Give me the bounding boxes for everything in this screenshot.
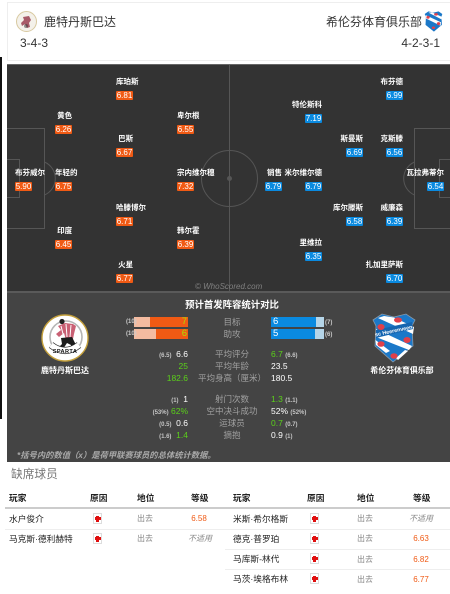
stat row: average rating: (6.5) 6.6 [159, 349, 188, 359]
away row: 马茨·埃格布林: 6.77 [413, 575, 429, 584]
player: 印度 [55, 226, 72, 249]
stat row: tackles: (1.6) 1.4 [159, 430, 188, 440]
away row: 马茨·埃格布林 [225, 572, 450, 586]
away goals baseline: (7) [325, 320, 332, 326]
stat row: shots [171, 394, 298, 404]
stat row: average age: 平均年龄 [215, 361, 249, 371]
player: 米尔维尔德: 米尔维尔德 [284, 168, 322, 177]
player: 扎加里萨斯: 6.70 [387, 274, 402, 283]
home row: 马克斯·德利赫特 [0, 532, 225, 546]
player: 布芬威尔 [15, 168, 45, 191]
home row: 马克斯·德利赫特: 不适用 [188, 534, 212, 543]
player: 韩尔霍 [177, 226, 200, 249]
home row: 马克斯·德利赫特: 出去 [137, 534, 153, 543]
player: 库尔滕斯 [333, 203, 363, 226]
watermark: © WhoScored.com [195, 282, 262, 291]
home players [15, 77, 214, 283]
stat row: tackles [159, 430, 293, 440]
player: 特伦斯科: 特伦斯科 [292, 100, 322, 109]
player: 年轻的 [55, 168, 78, 191]
player: 卑尔根: 卑尔根 [177, 111, 200, 120]
player: 哈滕博尔: 6.71 [117, 217, 132, 226]
stat row: average rating: 6.7 (6.6) [271, 349, 298, 359]
player: 宗内维尔穗: 宗内维尔穗 [177, 168, 214, 177]
player: 米尔维尔德 [284, 168, 322, 191]
player: 瓦拉弗蒂尔: 6.54 [428, 182, 443, 191]
player: 卑尔根 [177, 111, 200, 134]
player: 印度: 印度 [57, 226, 72, 235]
header panel [7, 2, 450, 61]
goals label: 目标 [223, 317, 240, 327]
player: 印度: 6.45 [56, 240, 71, 249]
player: 特伦斯科 [292, 100, 322, 123]
stat row: aerial duels: 空中决斗成功 [206, 406, 258, 416]
away row: 马茨·埃格布林: 马茨·埃格布林 [233, 574, 288, 584]
player: 巴斯: 巴斯 [118, 134, 133, 143]
stats title: 预计首发阵容统计对比 [185, 299, 279, 310]
table header rule [225, 507, 450, 509]
stat row: dribbles: 0.7 (0.7) [271, 418, 298, 428]
stat row: average height: 182.6 [167, 373, 188, 383]
player: 年轻的: 年轻的 [55, 168, 78, 177]
icon: home team crest small [16, 11, 37, 32]
stat row: average height: 180.5 [271, 373, 292, 383]
column: rating: 等级 [413, 493, 430, 503]
away row: 马库斯-林代: 马库斯-林代 [233, 554, 279, 564]
player: 火星 [116, 260, 133, 283]
stat row: tackles: 摘抱 [223, 430, 240, 440]
row rule [5, 529, 225, 530]
player: 库珀斯: 库珀斯 [116, 77, 138, 86]
away assists baseline: (6) [325, 332, 332, 338]
away formation: 4-2-3-1 [401, 36, 440, 50]
assists label: 助攻 [223, 329, 240, 339]
home row: 马克斯·德利赫特: 马克斯·德利赫特 [9, 534, 73, 544]
away row: 米斯·希尔格斯: 不适用 [409, 514, 433, 523]
player: 布芬德: 布芬德 [380, 77, 403, 86]
home row: 水户俊介: 出去 [137, 514, 153, 523]
player: 卑尔根: 6.55 [178, 125, 193, 134]
home formation: 3-4-3 [20, 36, 48, 50]
player: 宗内维尔穗: 7.32 [178, 182, 193, 191]
stat row: average age: 23.5 [271, 361, 288, 371]
home team label: 鹿特丹斯巴达 [41, 366, 89, 375]
assists comparison bars [126, 328, 332, 339]
player: 特伦斯科: 7.19 [306, 114, 321, 123]
away table header [225, 0, 450, 505]
panel: missing players away table rules [225, 507, 450, 570]
left edge strip [0, 57, 2, 419]
player: 哈滕博尔: 哈滕博尔 [116, 203, 146, 212]
player: 斯曼斯: 斯曼斯 [340, 134, 363, 143]
player: 销售: 销售 [267, 168, 282, 177]
icon: Heerenveen crest [372, 314, 416, 362]
stat row: dribbles: 运球员 [219, 418, 245, 428]
stat row: aerial duels: (53%) 62% [153, 406, 188, 416]
stat row: dribbles: (0.5) 0.6 [159, 418, 188, 428]
player: 米尔维尔德: 6.79 [306, 182, 321, 191]
player: 库尔滕斯: 库尔滕斯 [333, 203, 363, 212]
player: 销售: 6.79 [266, 182, 281, 191]
player: 斯曼斯: 6.69 [347, 148, 362, 157]
player: 韩尔霍: 6.39 [178, 240, 193, 249]
icon: Heerenveen crest: sc Heerenveen [375, 325, 413, 338]
stat row: average age: 25 [179, 361, 188, 371]
away goals bar: 6 [273, 316, 278, 327]
table header rule [5, 507, 225, 509]
stat row: shots: 射门次数 [215, 394, 249, 404]
home team name: 鹿特丹斯巴达 [44, 15, 116, 29]
player: 年轻的: 6.75 [56, 182, 71, 191]
home row: 水户俊介 [9, 513, 207, 524]
away goals bar [271, 317, 324, 327]
player: 巴斯 [116, 134, 133, 157]
figure [56, 323, 76, 340]
away row: 马库斯-林代: 6.82 [413, 555, 429, 564]
stat row: average height [167, 373, 292, 383]
column: player: 玩家 [233, 493, 250, 503]
column: reason: 原因 [307, 493, 324, 503]
panel: missing players home table [5, 507, 225, 530]
player: 库尔滕斯: 6.58 [347, 217, 362, 226]
away row: 米斯·希尔格斯: 出去 [357, 514, 373, 523]
away assists bar: 5 [273, 328, 278, 339]
away row: 米斯·希尔格斯 [225, 512, 450, 526]
player: 瓦拉弗蒂尔: 瓦拉弗蒂尔 [406, 168, 444, 177]
player: 销售 [265, 168, 282, 191]
column: rating: 等级 [191, 493, 208, 503]
player: 黄色: 黄色 [57, 111, 72, 120]
player: 布芬德 [380, 77, 403, 100]
column: status: 地位 [137, 493, 154, 503]
player: 布芬德: 6.99 [387, 91, 402, 100]
player: 库珀斯: 6.81 [117, 91, 132, 100]
player: 威廉森 [380, 203, 403, 226]
away assists bar [271, 329, 324, 339]
stat row: average height: 平均身高（厘米） [198, 373, 266, 383]
player: 瓦拉弗蒂尔 [406, 168, 444, 191]
home assists bar [134, 329, 188, 339]
heading: missing players: 缺席球员 [11, 468, 58, 481]
home assists bar: 6 [182, 328, 187, 339]
stat row: shots: (1) 1 [171, 394, 188, 404]
home row: 水户俊介: 6.58 [191, 514, 207, 523]
player: 里维拉 [300, 238, 322, 261]
player: 库珀斯 [116, 77, 138, 100]
away row: 德克·普罗珀: 德克·普罗珀 [233, 534, 279, 544]
away row: 马库斯-林代: 出去 [357, 555, 373, 564]
row rule [225, 549, 450, 550]
away row: 德克·普罗珀: 6.63 [413, 534, 429, 543]
player: 布芬威尔: 布芬威尔 [15, 168, 45, 177]
player: 里维拉: 里维拉 [300, 238, 322, 247]
icon: Sparta crest: SPARTA [53, 349, 77, 355]
home row: 水户俊介: 水户俊介 [9, 514, 44, 524]
column: reason: 原因 [90, 493, 107, 503]
column: status: 地位 [357, 493, 374, 503]
player: 斯曼斯 [340, 134, 363, 157]
away team label: 希伦芬体育俱乐部 [370, 366, 434, 375]
player: 里维拉: 6.35 [306, 252, 321, 261]
stat row: aerial duels [152, 406, 306, 416]
home table header [9, 493, 208, 503]
player: 扎加里萨斯: 扎加里萨斯 [366, 260, 403, 269]
column: player: 玩家 [9, 493, 26, 503]
player: 黄色: 6.26 [56, 125, 71, 134]
player: 黄色 [55, 111, 72, 134]
home goals baseline: (10) [126, 319, 137, 325]
home assists baseline: (10) [126, 331, 137, 337]
home goals bar: 7 [182, 316, 187, 327]
footnote: *括号内的数值（x）是荷甲联赛球员的总体统计数据。 [17, 450, 216, 460]
player: 威廉森: 6.39 [387, 217, 402, 226]
home goals bar [134, 317, 188, 327]
away team name: 希伦芬体育俱乐部 [326, 15, 422, 29]
away row: 米斯·希尔格斯: 米斯·希尔格斯 [233, 514, 288, 524]
stat row: aerial duels: 52% (52%) [271, 406, 306, 416]
player: 克斯滕: 克斯滕 [380, 134, 403, 143]
icon: away team crest small [424, 11, 442, 32]
player: 布芬威尔: 5.90 [16, 182, 31, 191]
goals comparison bars [126, 316, 332, 327]
away players [265, 77, 444, 283]
row rule [225, 569, 450, 570]
away row: 德克·普罗珀: 出去 [357, 534, 373, 543]
away row: 马茨·埃格布林: 出去 [357, 575, 373, 584]
player: 克斯滕 [380, 134, 403, 157]
stat row: average age [178, 361, 288, 371]
player: 火星: 火星 [118, 260, 133, 269]
row rule [225, 529, 450, 530]
player: 火星: 6.77 [117, 274, 132, 283]
panel: pitch [7, 64, 450, 293]
player: 韩尔霍: 韩尔霍 [177, 226, 200, 235]
player: 宗内维尔穗 [177, 168, 214, 191]
player: 克斯滕: 6.56 [387, 148, 402, 157]
player: 巴斯: 6.67 [117, 148, 132, 157]
player: 扎加里萨斯 [366, 260, 403, 283]
stat row: tackles: 0.9 (1) [271, 430, 293, 440]
player: 哈滕博尔 [116, 203, 146, 226]
away row: 德克·普罗珀 [225, 532, 450, 546]
stat row: average rating: 平均评分 [215, 349, 249, 359]
stat row: shots: 1.3 (1.1) [271, 394, 298, 404]
stat row: dribbles [159, 418, 298, 428]
panel: lineup stats comparison [7, 293, 450, 462]
player: 威廉森: 威廉森 [380, 203, 403, 212]
icon: Sparta crest [41, 314, 89, 362]
away row: 马库斯-林代 [225, 552, 450, 566]
stat row: average rating [159, 349, 298, 359]
